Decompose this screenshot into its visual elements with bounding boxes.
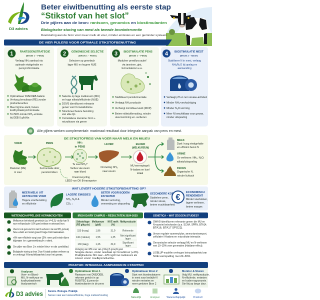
panel: genetica wat zeggen studies: LIGBLUP-modellen verhogen betrouwbaarheid van bbox=[153, 251, 208, 255]
arrow bbox=[28, 156, 36, 158]
subtitle text block: Doelsturing aan de bron voor meer melk uit voer, minder emissies en een gezonder systeem bbox=[41, 34, 167, 37]
panel: genetica wat zeggen studies: GENETICA – WAT ZEGGEN STUDIES? bbox=[153, 214, 199, 218]
benefit: beter voor bodem en water: EN WATER bbox=[101, 194, 115, 198]
flow step: NH3 in pens bbox=[70, 140, 90, 174]
step: optimaliseer bron 1 bbox=[46, 269, 105, 286]
panel: pijler 4 biostimulatie mest: Minder N₂O-vorming bbox=[166, 106, 190, 110]
output: melk: MELK bbox=[177, 138, 185, 142]
footer icon: analysen: Analysen bbox=[150, 296, 161, 299]
panel: wetenschappelijke kerninzichten: voor melkproductie (+2% goed zetbaar en antwoord bron. bbox=[13, 221, 65, 225]
panel: pijler 3 biostimulatie pens: ureumvorming en -verliezen bbox=[115, 115, 147, 119]
panel: pijler 3 biostimulatie pens bbox=[110, 47, 159, 126]
panel: pijler 4 biostimulatie mest: 4 bbox=[165, 52, 169, 58]
table: resultaten: 1,56 bbox=[96, 236, 101, 239]
benefit: economisch rendement: ECONOMISCH bbox=[186, 190, 205, 194]
step: optimaliseer bron 1: RUSITEC & pens-de bbox=[75, 279, 99, 283]
benefit: meer melk: en efficiëntie bbox=[22, 202, 37, 206]
output: melk: Doel: hoog eiwitgehalte bbox=[177, 142, 204, 146]
panel: pijler 4 biostimulatie mest: BIOSTIMULATIE MEST bbox=[175, 50, 204, 54]
step: optimaliseer bron 2: meer gesloten Bron 2 bbox=[132, 282, 157, 286]
panel: genetica wat zeggen studies: cellulaire N-balans en microbiota-interactie. bbox=[153, 234, 201, 238]
footer tagline: Samen naar een kostenefficiënte, hoge melkverhouding bbox=[48, 293, 109, 297]
step: analysen: koolhydraat/mest- bbox=[21, 279, 41, 283]
flow step: voer: in voer bbox=[14, 170, 22, 174]
table: resultaten: Melkproductie bbox=[120, 220, 137, 224]
footer icon: wetenschappelijk: Wetenschappelijk bbox=[167, 296, 186, 299]
panel: wetenschappelijke kerninzichten: +6% voer-efficiëntie zorgt voor 15%: meer geld minder lijnen bbox=[13, 236, 69, 240]
table: resultaten: (RE g/kg ds) bbox=[76, 224, 90, 226]
output: feces bbox=[164, 166, 195, 177]
panel: wetenschappelijke kerninzichten: Ureum is de gemene bron van N-verliezen: via voer/NH₃ (enkele) bbox=[13, 227, 69, 231]
icon: green forage bbox=[14, 74, 42, 92]
output: urine: stikstofuitspoeling bbox=[177, 160, 198, 164]
panel: pijler 4 biostimulatie mest bbox=[161, 47, 208, 126]
panel: genetica wat zeggen studies: BTA16, BTA17 SPG22). bbox=[153, 226, 183, 230]
callout: pijlers werken complementair bbox=[27, 127, 182, 135]
panel: pijler 1 rantsoenstrategie: 1 bbox=[10, 52, 13, 58]
flow step: bloed: totaal bbox=[137, 171, 144, 175]
panel: pijler 1 rantsoenstrategie: Optimaliseer DVE/OEB-balans bbox=[10, 94, 45, 98]
benefit: economisch rendement: betere marges bbox=[186, 204, 203, 208]
table: resultaten: (%) bbox=[111, 224, 115, 226]
title: “Stikstof van het slot” bbox=[41, 11, 129, 21]
panel: pijler 2 genomische selectie: genen voor N-metabolisme bbox=[62, 105, 93, 109]
panel: pijler 1 rantsoenstrategie bbox=[4, 47, 54, 126]
flow step: voer: Ruwvoer (RE) bbox=[10, 166, 26, 170]
panel: pijler 3 biostimulatie pens: via tanninen, gist, bbox=[122, 62, 142, 66]
output: melk bbox=[167, 138, 204, 150]
flow step: pens: PENS bbox=[46, 141, 53, 145]
flow step: pens: pensmicroben bbox=[42, 170, 58, 174]
output: melk: en efficiënt benut N bbox=[177, 145, 199, 149]
benefit: gezondere koeien: minder stress, bbox=[150, 199, 166, 203]
flow step: bloed: (MELKUREUM) bbox=[132, 146, 149, 149]
panel: pijler 2 genomische selectie: 2 bbox=[63, 52, 66, 58]
panel: pijler 1 rantsoenstrategie: optimale eiwitgehalte en bbox=[15, 62, 43, 66]
table: resultaten: Niet significant bbox=[120, 235, 136, 238]
step: monitor en sturen bbox=[164, 269, 210, 286]
table: resultaten: Referentie bbox=[122, 230, 134, 232]
flow step: NH3 in pens: Te veel NH₃? bbox=[73, 162, 88, 166]
title: Beter eiwitbenutting als eerste stap bbox=[41, 4, 172, 12]
panel: wetenschappelijke kerninzichten: en verbrugt N-beschikbaarheid voor het gewas. bbox=[13, 253, 63, 257]
banner: de vier pijlers bbox=[4, 40, 172, 46]
flow step: bloed: MU weerspiegelt bbox=[131, 164, 150, 168]
footer icon: praktisch: Praktisch bbox=[193, 296, 204, 299]
panel: genetica wat zeggen studies: N-voorziet beïnvloeden (o.a. SCNA, SPRN, BTA14, bbox=[153, 222, 207, 226]
panel: wetenschappelijke kerninzichten bbox=[4, 212, 71, 260]
panel: pijler 4 biostimulatie mest: minder uitspoeling bbox=[166, 115, 188, 119]
icon: dna and cow bbox=[71, 75, 98, 94]
footer icon: analysen bbox=[150, 288, 161, 299]
panel: pijler 3 biostimulatie pens: Verhoogt microbieel eiwit (MCP) bbox=[115, 106, 152, 110]
callout: ureumrecycling: LEEG-run OK B-transporter bbox=[65, 179, 97, 183]
step: optimaliseer bron 2: minder emissies en bbox=[132, 279, 155, 283]
step: analysen bbox=[8, 269, 44, 286]
step: optimaliseer bron 2: Optimaliseer Bron 2 bbox=[132, 269, 158, 273]
benefit: meer melk bbox=[9, 190, 47, 208]
panel: pijler 1 rantsoenstrategie: Verlaag NH₃-aanbod via bbox=[15, 59, 43, 63]
flow step: bloed: N-balans en koe/ bbox=[130, 167, 150, 171]
callout: ureumrecycling bbox=[60, 169, 97, 183]
panel: pijler 3 biostimulatie pens: BIOSTIMULATIE PENS bbox=[124, 50, 153, 54]
subtitle text block: Drie pijlers aan de bron: rantsoen, genomics en biostimulanten bbox=[41, 21, 167, 25]
panel: irish dairy campus resultaten: IRISH DAIRY CAMPUS – RESULTATEN 2024-2025 bbox=[78, 214, 138, 218]
table: resultaten: 150 (hoog) bbox=[77, 230, 89, 232]
flow step: NH3 in pens: naar bloed bbox=[74, 170, 87, 174]
output: feces: Organische N, bbox=[177, 170, 194, 174]
panel: pijler 2 genomische selectie: van elke lijn bbox=[62, 112, 76, 116]
banner: praktijk bbox=[4, 262, 208, 268]
table: resultaten: 130 (laag) bbox=[78, 243, 89, 246]
panel: pijler 2 genomische selectie: Selectie op lage melkureum (MU) bbox=[62, 94, 100, 98]
panel: pijler 2 genomische selectie: Structureel betere benutting bbox=[62, 109, 94, 113]
benefit: gezondere koeien bbox=[131, 192, 178, 208]
panel: pijler 2 genomische selectie: en hoge stikstofefficiëntie (NUE) bbox=[62, 98, 98, 102]
panel: pijler 2 genomische selectie: Cumulatieve toename: bron + bbox=[62, 116, 96, 120]
panel: pijler 1 rantsoenstrategie: RANTSOENSTRATEGIE bbox=[20, 50, 50, 54]
step: monitor en sturen: Volg MU, melkproductie, bbox=[182, 273, 210, 277]
panel: pijler 1 rantsoenstrategie: koolhydraatsynchronisatie bbox=[10, 108, 40, 112]
panel: praktijk stappen bbox=[4, 268, 210, 288]
title bbox=[41, 4, 172, 21]
step: analysen: Voer- en Bloed- bbox=[21, 273, 39, 277]
panel: wetenschappelijke kerninzichten: WETENSCHAPPELIJKE KERNINZICHTEN bbox=[12, 214, 63, 218]
arrows: fork to milk, urine, feces bbox=[148, 142, 164, 172]
panel: irish dairy campus resultaten bbox=[73, 212, 143, 260]
panel: pijler 2 genomische selectie: microbioom via genen bbox=[62, 119, 87, 123]
panel: pijler 4 biostimulatie mest: Minder NH₃-vervluchtiging bbox=[166, 100, 197, 104]
panel: genetica wat zeggen studies: met 10–15% over generaties (Haldane-effect). bbox=[153, 243, 203, 247]
panel: genetica wat zeggen studies: Genomische selectie verlaagt MU en N-verliezen bbox=[153, 240, 208, 244]
panel: pijler 3 biostimulatie pens: (BRON 1 – PENS) bbox=[129, 56, 147, 58]
output: feces: minder lichtoch bbox=[177, 173, 195, 177]
benefit: lagere emissies: LAGERE EMISSIES bbox=[66, 192, 91, 196]
table: resultaten: NUE melk bbox=[108, 222, 119, 224]
panel: pijler 3 biostimulatie pens: Stabiliseert pensfermentatie bbox=[115, 95, 147, 99]
panel: pijler 2 genomische selectie: Selecteer op genetisch bbox=[69, 59, 96, 63]
benefit: lagere emissies: NH₃, N₂O & bbox=[66, 197, 80, 201]
table: resultaten: 140 (midden) bbox=[76, 236, 90, 239]
flow step: lever bbox=[99, 142, 119, 173]
callout: pijlers werken complementair: Alle pijlers werken complementair: maximaal resultaat door integrale aanpak van pens en mest. bbox=[37, 129, 182, 133]
flow step: lever: naar ureum bbox=[102, 169, 116, 173]
panel: pijler 3 biostimulatie pens: Moduleer pensflora actief bbox=[118, 59, 147, 63]
panel: wat levert hogere stikstofbenutting op bbox=[4, 186, 208, 210]
subtitle text block bbox=[41, 21, 167, 37]
footer icon: natuurlijk bbox=[131, 288, 142, 299]
output: feces: FECES bbox=[177, 166, 186, 170]
panel: pijler 1 rantsoenstrategie: pensynchronisatie bbox=[19, 66, 40, 70]
icon: manure tank bbox=[170, 76, 197, 91]
panel: pijler 1 rantsoenstrategie: bij OEB 0 g/kVds bbox=[10, 116, 30, 120]
panel: genetica wat zeggen studies: GWAS-identificeren relevante genen die MU en bbox=[153, 220, 206, 224]
panel: wetenschappelijke kerninzichten: Om pijler van Bron 1 is minder kleur- en als combiblad. bbox=[13, 245, 69, 249]
panel: wetenschappelijke kerninzichten: hoe eiwit en kost goed hoge biomassaten. bbox=[13, 230, 65, 234]
benefit: gezondere koeien: GEZONDERE KOEIEN bbox=[150, 192, 178, 196]
step: optimaliseer bron 2: in mest voor bedrijfs-N bbox=[132, 276, 158, 280]
flow step: lever: LEVER bbox=[105, 142, 114, 146]
image: cow in meadow bbox=[166, 7, 212, 46]
benefit: beter voor bodem en water: vermesting en uitspoeling bbox=[101, 202, 130, 206]
table: resultaten: Significant bbox=[122, 242, 134, 245]
panel: pijler 2 genomische selectie bbox=[57, 47, 107, 126]
table: resultaten: 31,9 bbox=[111, 230, 116, 232]
table note: hoogste dieren, onder resultaat op N-melkzuur (+2%). bbox=[75, 250, 139, 254]
panel: pijler 2 genomische selectie: GENOMISCHE SELECTIE bbox=[71, 50, 104, 54]
arrow bbox=[88, 156, 98, 158]
logo: D3 advies bbox=[8, 2, 29, 31]
panel: wetenschappelijke kerninzichten: Melkureum beïnvloedt genetisch (ca. h²≈0,3); via lijn kan N bbox=[13, 218, 69, 222]
benefit: meer melk: HETZELFDE VOER bbox=[22, 194, 46, 198]
footer tagline: Kennis. Biologie. Praktijk. bbox=[48, 289, 78, 293]
panel: pijler 3 biostimulatie pens: 3 bbox=[114, 52, 118, 58]
panel: pijler 2 genomische selectie: (BRON 1 – PENS) bbox=[78, 56, 97, 58]
panel: pijler 2 genomische selectie: lager MU en hogere NUE bbox=[68, 62, 97, 66]
step: optimaliseer bron 1: Rantsoen met DVE/OEB, bbox=[75, 273, 104, 277]
step: optimaliseer bron 2 bbox=[110, 269, 161, 286]
output: urine bbox=[166, 152, 205, 164]
table: resultaten: (g/dl) bbox=[95, 224, 101, 226]
panel: pijler 1 rantsoenstrategie: Meer lignine-sterk, betere bbox=[10, 105, 39, 109]
panel: pijler 1 rantsoenstrategie: Tot 50% minder NH₃-emissie bbox=[10, 112, 43, 116]
output: urine: Ov verliezen: NH₃, N₂O; bbox=[177, 156, 205, 160]
step: optimaliseer bron 1: rekenen gericht in op bbox=[75, 276, 99, 280]
flow step: NH3 in pens: Verlies via ureum bbox=[70, 166, 90, 170]
step: monitor en sturen: Stel bij op lange duur. bbox=[182, 282, 207, 286]
panel: pijler 4 biostimulatie mest: Stabiliseer N in mest, verlaag bbox=[168, 59, 202, 63]
footer icon: wetenschappelijk bbox=[167, 288, 186, 299]
step: optimaliseer bron 2: Start met biostimulatoren bbox=[132, 273, 161, 277]
benefit: beter voor bodem en water: BETER VOOR BODEM bbox=[101, 190, 130, 194]
benefit: economisch rendement bbox=[172, 190, 208, 208]
benefit: gezondere koeien: betere vruchtbaarheid bbox=[150, 203, 175, 207]
flow step: voer bbox=[10, 141, 28, 174]
footer logo bbox=[5, 288, 44, 298]
flow step: bloed bbox=[130, 142, 150, 175]
flow step: pens: Fermentatie door bbox=[40, 166, 59, 170]
benefit: lagere emissies bbox=[51, 192, 91, 208]
panel: de stikstofreis bbox=[4, 135, 208, 185]
table: resultaten: Melkureum bbox=[92, 222, 104, 224]
step: monitor en sturen: Monitor & Sturen bbox=[182, 269, 204, 273]
table: resultaten: 1,26 bbox=[96, 243, 101, 246]
table: resultaten: 1,86 bbox=[96, 230, 101, 232]
arrow bbox=[65, 156, 74, 158]
step: monitor en sturen: en bodem-agronomie. bbox=[182, 279, 207, 283]
panel: pijler 3 biostimulatie pens: Verlaagt NH₃-productie bbox=[115, 100, 142, 104]
panel: pijler 1 rantsoenstrategie: (BRON 1 – PENS) bbox=[26, 56, 44, 58]
callout: ureumrecycling: Ureumrecycling bbox=[72, 175, 90, 179]
benefit: gezondere koeien: Stabielere pens, bbox=[150, 195, 169, 199]
step: optimaliseer bron 1: Optimaliseer Bron 1 bbox=[75, 269, 101, 273]
footer logo: D3 advies bbox=[16, 291, 44, 298]
flow step: voer: VOER bbox=[14, 141, 22, 145]
benefit: meer melk: MEER MELK UIT bbox=[22, 190, 44, 194]
table: resultaten: lager bbox=[125, 244, 131, 247]
table note: Verlaging van 18% voer van g N/kg (6 groepN gelet bbox=[75, 247, 123, 251]
footer icon: praktisch bbox=[193, 289, 204, 299]
table: resultaten: 1,35 bbox=[111, 236, 116, 239]
flow step: bloed: BLOED bbox=[136, 142, 145, 146]
step: optimaliseer bron 1: biostimulanten in de pens bbox=[75, 282, 105, 286]
logo: D3 advies: D3 advies bbox=[9, 26, 29, 31]
panel: pijler 3 biostimulatie pens: Betere stikstofbenutting, minder bbox=[115, 111, 151, 115]
icon: rumen microbes bbox=[121, 72, 151, 93]
benefit: economisch rendement: RENDEMENT bbox=[186, 193, 203, 197]
panel: de stikstofreis: DE STIKSTOFREIS VAN VOER NAAR MELK EN MILIEU bbox=[64, 136, 150, 140]
benefit: economisch rendement: Minder voerkosten, bbox=[186, 197, 208, 201]
panel: genetica wat zeggen studies bbox=[144, 212, 208, 258]
subtitle text block: Biologische sturing van mest als tweede broninterventie bbox=[41, 28, 142, 32]
banner: praktijk: PRAKTIJK: INTEGRAAL AANPAKKEN IN 4 STAPPEN bbox=[68, 263, 144, 267]
panel: pijler 4 biostimulatie mest: (BRON 2 – MEST) bbox=[180, 56, 198, 58]
panel: pijler 1 rantsoenstrategie: Verhoog benutbaar (RE) zonder bbox=[10, 98, 46, 102]
benefit: meer melk: Hogere voerbenutting bbox=[22, 198, 47, 202]
flow step: lever: Omzetting NH₃ bbox=[100, 165, 118, 169]
output: urine: URINE bbox=[177, 152, 186, 156]
benefit: beter voor bodem en water: Minder verzuring, bbox=[101, 198, 121, 202]
step: analysen: biodynamisch bbox=[21, 282, 37, 286]
banner: de vier pijlers: DE VIER PIJLERS VOOR OPTIMALE STIKSTOFBENUTTING bbox=[39, 41, 137, 45]
panel: pijler 2 genomische selectie: DGVS identificeert relevante bbox=[62, 102, 95, 106]
arrow bbox=[121, 156, 132, 158]
flow step: NH3 in pens: NH₃ bbox=[77, 140, 83, 144]
table note bbox=[75, 247, 139, 260]
panel: wetenschappelijke kerninzichten: Biologische sturing op bron 2 kan N totaal opslaan verliezen op bbox=[13, 250, 69, 254]
benefit: economisch rendement: lagere verliezen, bbox=[186, 201, 205, 205]
panel: genetica wat zeggen studies: NUE-voorspelling met 20–30%. bbox=[153, 254, 191, 258]
panel: pijler 4 biostimulatie mest: aanwending bbox=[178, 66, 192, 70]
benefit: lagere emissies: CO₂ ↓ bbox=[66, 202, 73, 206]
panel: pijler 4 biostimulatie mest: Verlaagt pH en rem urease-activiteit bbox=[166, 95, 207, 99]
step: analysen: Analysen bbox=[21, 270, 33, 274]
footer tagline bbox=[45, 289, 109, 298]
table note: Praktijkreductie: MU naar ~125 mg/dl met melkureum als bbox=[75, 253, 138, 257]
table: resultaten: 34,9 bbox=[111, 243, 116, 246]
benefit: economisch rendement: € bbox=[176, 193, 181, 202]
step: monitor en sturen: N-efficiëntie, emissies bbox=[182, 276, 207, 280]
panel: pijler 1 rantsoenstrategie: productieverlies bbox=[10, 101, 29, 105]
flow step: NH3 in pens: in PENS bbox=[75, 144, 85, 148]
panel: wat levert hogere stikstofbenutting op: WAT LEVERT HOGERE STIKSTOFBENUTTING OP? bbox=[72, 187, 146, 191]
table note: stuur voor melkproductie. bbox=[75, 256, 115, 260]
step: analysen: MU, N-melkzuur en bbox=[21, 276, 44, 280]
panel: genetica wat zeggen studies: Ureum regulate voorwerp/plus, ammoniumtransport, bbox=[153, 232, 207, 236]
panel: wetenschappelijke kerninzichten: tijvan in genetisch niet. bbox=[13, 239, 53, 243]
panel: pijler 3 biostimulatie pens: fermentatoren e.a. bbox=[122, 66, 143, 70]
footer icon: natuurlijk: Natuurlijk bbox=[131, 296, 142, 299]
flow step: pens bbox=[37, 141, 61, 174]
table: resultaten: lager bbox=[125, 237, 131, 240]
panel: pijler 4 biostimulatie mest: NH₃/N₂O bij opslag en bbox=[172, 62, 198, 66]
table: resultaten bbox=[75, 220, 137, 248]
table: resultaten: Stikstoftype bbox=[76, 220, 90, 224]
benefit: beter voor bodem en water bbox=[91, 190, 130, 207]
panel: pijler 4 biostimulatie mest: Meer N beschikbaar voor gewas, bbox=[166, 111, 204, 115]
